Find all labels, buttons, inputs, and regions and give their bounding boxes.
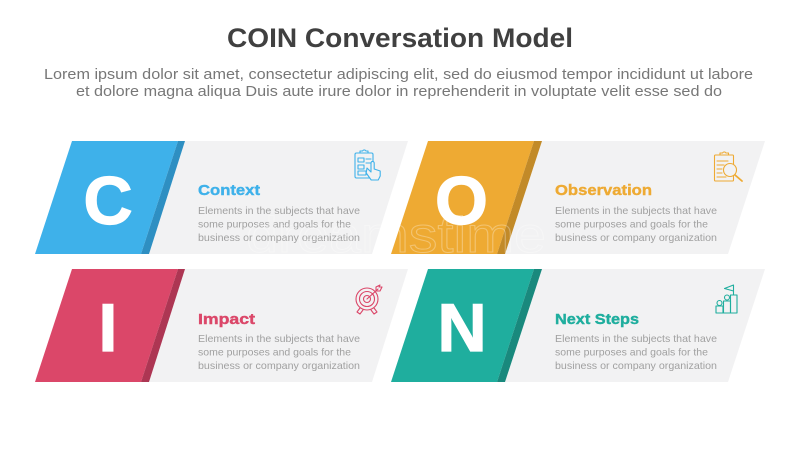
panel: Context [35, 141, 408, 254]
text block: Context: Elements in the subjects that have [198, 205, 360, 217]
icon: steps with flag [716, 285, 737, 313]
letter C: C [83, 163, 133, 239]
text block: Observation: some purposes and goals for the [555, 218, 708, 230]
text block: Impact [198, 333, 360, 372]
panel: Next Steps [391, 269, 765, 382]
letter N: N [437, 290, 487, 366]
panel: Observation [391, 141, 765, 254]
text block: Impact: Elements in the subjects that have [198, 333, 360, 345]
letter I: I [99, 290, 117, 366]
text block: Context [198, 205, 360, 244]
text block: Observation: business or company organization [555, 232, 717, 244]
panel: Impact [35, 269, 408, 382]
text block: Next Steps: business or company organization [555, 360, 717, 372]
heading: Impact: Impact [198, 311, 255, 328]
icon: target with arrow [356, 285, 382, 314]
subtitle text [44, 66, 753, 100]
subtitle text: et dolore magna aliqua Duis aute irure dolor in reprehenderit in voluptate velit esse sed do [76, 83, 722, 100]
icon: clipboard with magnifier [714, 152, 742, 181]
watermark: dreamstime [246, 207, 546, 263]
icon: clipboard with hand [355, 150, 380, 180]
text block: Observation: Elements in the subjects that have [555, 205, 717, 217]
text block: Observation [555, 205, 717, 244]
text block: Next Steps [555, 333, 717, 372]
heading: Observation: Observation [555, 182, 652, 199]
text block: Context: business or company organization [198, 232, 360, 244]
text block: Next Steps: Elements in the subjects that have [555, 333, 717, 345]
heading: Context: Context [198, 182, 260, 199]
letter O: O [435, 163, 488, 239]
text block: Next Steps: some purposes and goals for the [555, 346, 708, 358]
subtitle text: Lorem ipsum dolor sit amet, consectetur adipiscing elit, sed do eiusmod tempor incididunt ut labore [44, 66, 753, 83]
text block: Impact: business or company organization [198, 360, 360, 372]
text block: Context: some purposes and goals for the [198, 218, 351, 230]
heading: Next Steps: Next Steps [555, 311, 639, 328]
text block: Impact: some purposes and goals for the [198, 346, 351, 358]
title: COIN Conversation Model [227, 23, 573, 53]
